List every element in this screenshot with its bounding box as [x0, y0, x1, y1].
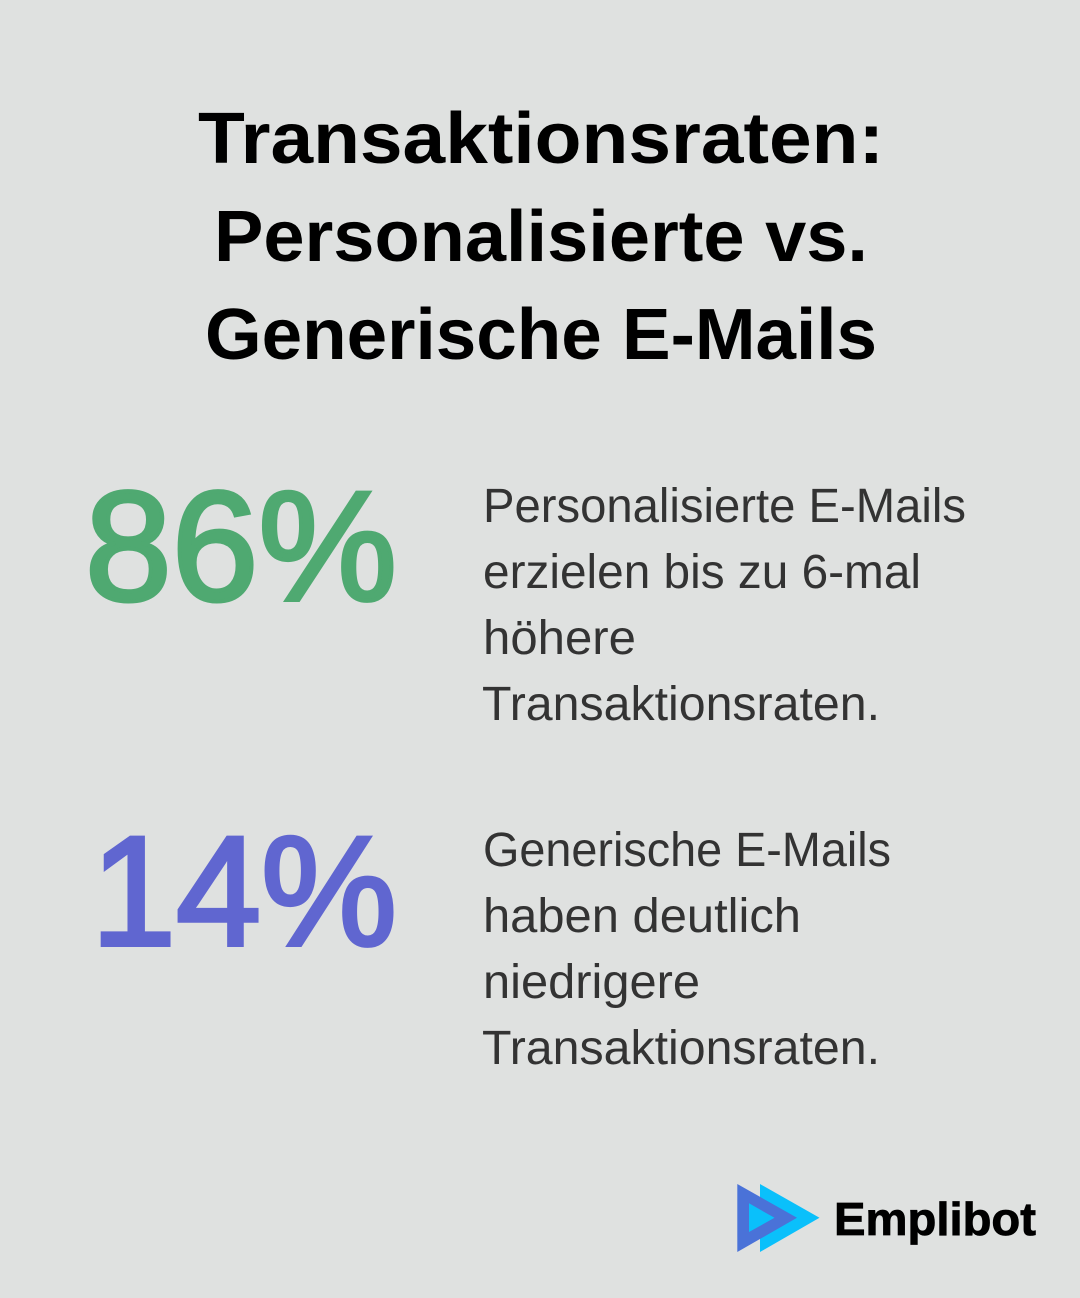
text block: generic emails: Transaktionsraten.	[482, 1022, 880, 1075]
text block: generic emails: haben deutlich	[483, 890, 801, 943]
title: Transaktionsraten:	[198, 99, 884, 179]
text block: personalised emails: erzielen bis zu 6-mal	[483, 546, 921, 599]
stat: 14%: 14%	[91, 805, 397, 979]
text block: generic emails: niedrigere	[483, 956, 700, 1009]
icon: Emplibot logo mark	[737, 1184, 820, 1252]
title: Generische E-Mails	[205, 295, 877, 375]
title: Personalisierte vs.	[214, 197, 868, 277]
stat: 86%: 86%	[85, 460, 397, 634]
title	[198, 99, 884, 375]
text block: personalised emails: höhere	[483, 612, 636, 665]
text block: generic emails: Generische E-Mails	[483, 824, 891, 877]
text block: personalised emails: Personalisierte E-Mails	[483, 480, 966, 533]
text block: generic emails	[482, 824, 891, 1075]
text block: personalised emails: Transaktionsraten.	[482, 678, 880, 731]
logo wordmark: Emplibot	[834, 1193, 1036, 1245]
text block: personalised emails	[482, 480, 966, 731]
